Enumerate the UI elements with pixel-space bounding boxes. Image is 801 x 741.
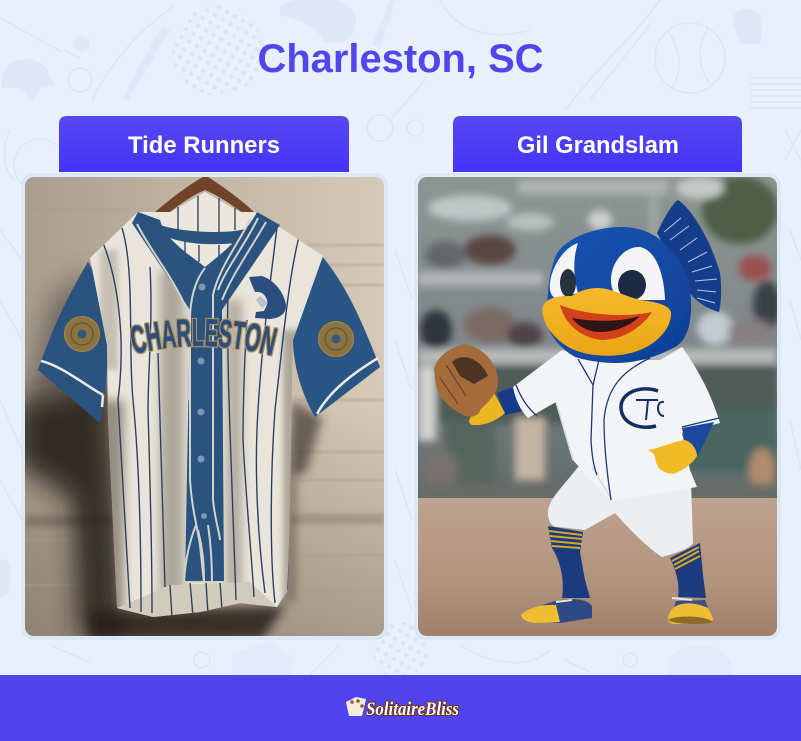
eyes bbox=[550, 243, 578, 298]
sleeves bbox=[38, 262, 108, 423]
chest logo: leaping fish bbox=[249, 276, 286, 319]
heading tab: team name: Tide Runners bbox=[128, 132, 280, 159]
beak bbox=[543, 288, 671, 356]
infield dirt bbox=[418, 498, 777, 636]
title: Charleston, SC bbox=[258, 37, 544, 81]
right arm and mitt bbox=[648, 422, 714, 474]
jersey body bbox=[90, 212, 323, 617]
blurred crowd and stands bbox=[418, 176, 781, 496]
panel: left team uniform bbox=[22, 116, 388, 640]
dorsal fin bbox=[657, 200, 721, 312]
collar and placket bbox=[132, 212, 280, 582]
jersey bbox=[513, 347, 720, 501]
sleeve patch bbox=[64, 316, 100, 352]
head bbox=[543, 227, 691, 363]
buttons bbox=[198, 284, 207, 519]
mascot photo bbox=[418, 176, 781, 636]
chest wordmark: CHARLESTON bbox=[130, 318, 278, 356]
photo frame bbox=[22, 174, 387, 639]
trousers bbox=[548, 467, 693, 557]
heading tab: team name bbox=[59, 116, 349, 172]
socks bbox=[548, 526, 706, 598]
footer logo bbox=[346, 697, 459, 720]
chest logo bbox=[621, 389, 664, 427]
mascot bbox=[434, 200, 721, 624]
back of neck bbox=[170, 192, 240, 212]
shoes bbox=[521, 598, 713, 624]
cast shadow bbox=[15, 265, 322, 640]
icon: playing cards bbox=[346, 697, 366, 716]
photo frame bbox=[415, 174, 780, 639]
panel: right team mascot bbox=[415, 116, 781, 639]
jersey photo bbox=[25, 177, 384, 636]
heading tab: mascot name bbox=[453, 116, 742, 172]
mouth bbox=[560, 305, 652, 340]
sleeve patch bbox=[318, 322, 354, 356]
inner shirt hem shade bbox=[117, 582, 277, 617]
heading tab: mascot name: Gil Grandslam bbox=[517, 132, 679, 159]
footer bar bbox=[0, 675, 801, 741]
hanger bbox=[155, 177, 254, 212]
jersey bbox=[38, 192, 380, 617]
baseball glove and left arm bbox=[434, 344, 527, 425]
brand wordmark: SolitaireBliss bbox=[366, 699, 459, 720]
